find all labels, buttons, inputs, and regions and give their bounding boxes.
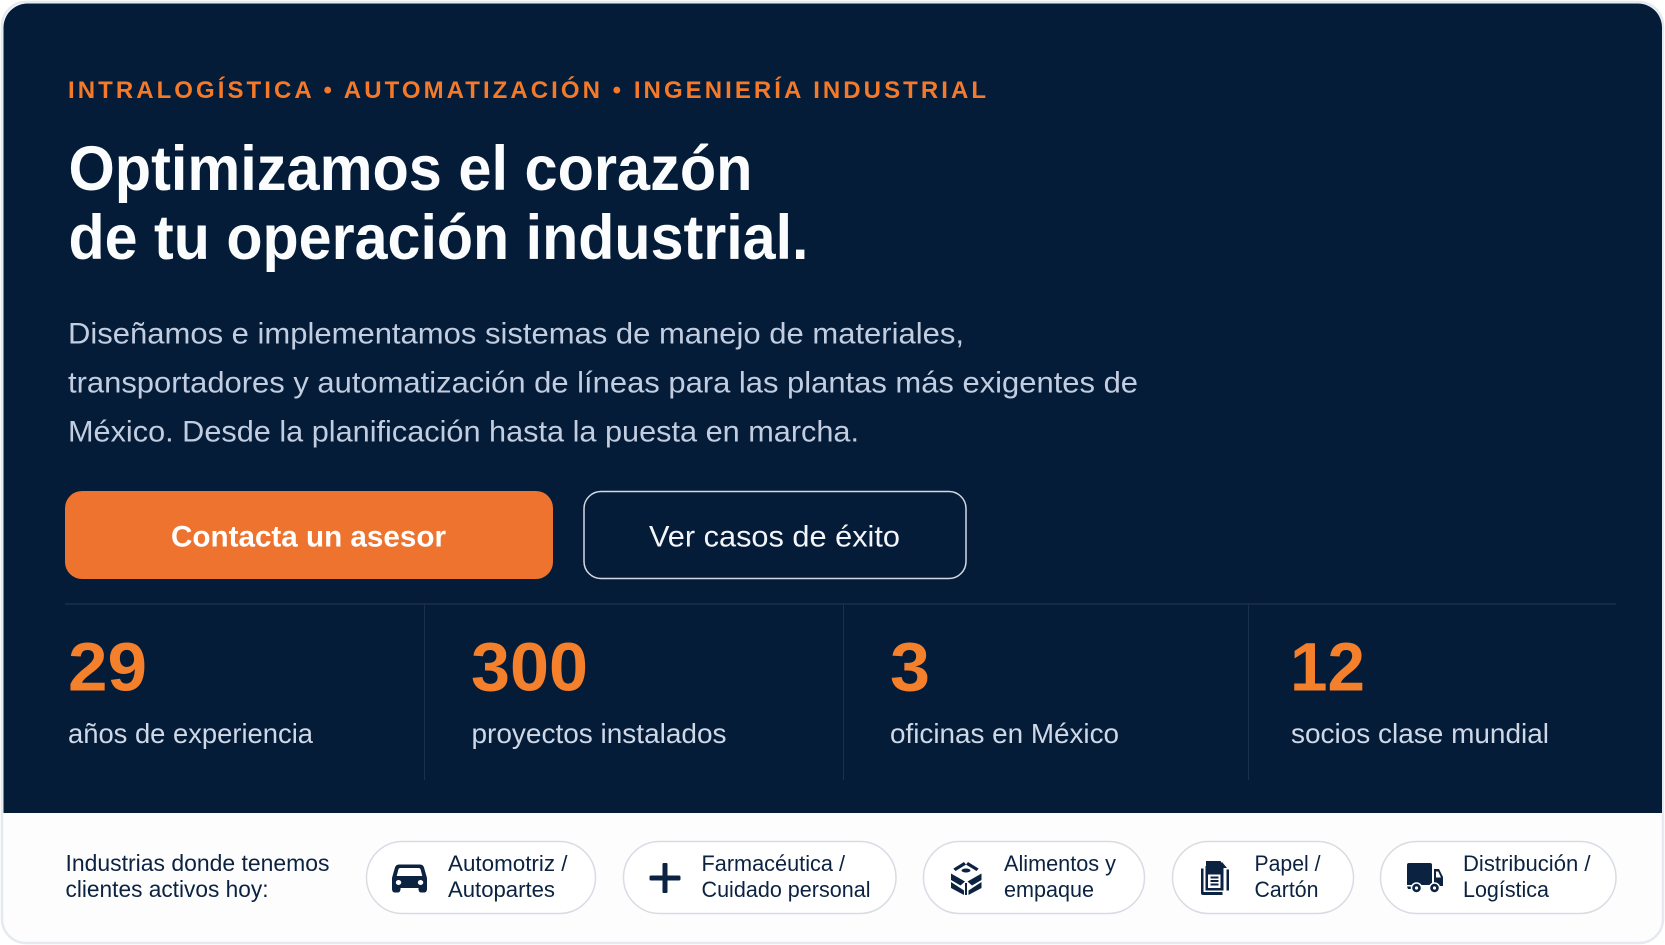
- button: contacta un asesor: [65, 491, 553, 579]
- panel: industries: [66, 842, 1616, 914]
- stat: 300 proyectos instalados: [471, 628, 726, 749]
- icon: documents: [1201, 861, 1229, 895]
- button: ver casos de éxito: [584, 492, 966, 578]
- button: ver casos de éxito: Ver casos de éxito: [649, 520, 900, 554]
- stat: 300 proyectos instalados: proyectos instalados: [472, 718, 726, 749]
- button: contacta un asesor: Contacta un asesor: [171, 520, 446, 554]
- pill: automotriz: Automotriz /: [448, 851, 568, 876]
- pill: alimentos: Alimentos y: [1004, 851, 1117, 876]
- stat: 3 oficinas en México: [890, 628, 1119, 749]
- stat: 3 oficinas en México: oficinas en México: [890, 718, 1119, 749]
- icon: package: [951, 862, 982, 895]
- eyebrow: INTRALOGÍSTICA • AUTOMATIZACIÓN • INGENIERÍA INDUSTRIAL: [68, 76, 986, 104]
- pill: alimentos: [924, 842, 1144, 914]
- pill: distribución: Logística: [1463, 877, 1549, 902]
- stat: 29 años de experiencia: años de experiencia: [68, 718, 313, 749]
- pill: alimentos: empaque: [1004, 877, 1094, 902]
- stat: 12 socios clase mundial: 12: [1290, 628, 1365, 706]
- pill: papel: [1172, 842, 1354, 914]
- description: [68, 318, 1138, 448]
- icon: plus: [650, 863, 680, 893]
- stat: 12 socios clase mundial: [1290, 628, 1549, 749]
- pill: papel: Papel /: [1254, 851, 1321, 876]
- stat: 3 oficinas en México: 3: [890, 628, 930, 706]
- description: transportadores y automatización de líneas para las plantas más exigentes de: [68, 366, 1138, 400]
- stat: 300 proyectos instalados: 300: [471, 628, 588, 706]
- industries intro text: Industrias donde tenemos: [66, 850, 330, 876]
- stat: 29 años de experiencia: [68, 628, 313, 749]
- industries intro text: clientes activos hoy:: [66, 876, 268, 902]
- title: de tu operación industrial.: [68, 203, 808, 273]
- icon: truck: [1407, 863, 1443, 893]
- title: Optimizamos el corazón: [68, 134, 752, 204]
- stat: 12 socios clase mundial: socios clase mundial: [1291, 718, 1549, 749]
- pill: farmacéutica: Cuidado personal: [702, 877, 870, 902]
- pill: farmacéutica: [624, 842, 896, 914]
- description: Diseñamos e implementamos sistemas de manejo de materiales,: [68, 318, 964, 350]
- industries intro text: [66, 850, 330, 902]
- stat: 29 años de experiencia: 29: [68, 628, 147, 706]
- icon: car: [392, 864, 427, 892]
- pill: papel: Cartón: [1254, 877, 1318, 902]
- description: México. Desde la planificación hasta la puesta en marcha.: [68, 416, 859, 448]
- pill: distribución: [1380, 842, 1616, 914]
- pill: distribución: Distribución /: [1463, 851, 1591, 876]
- pill: automotriz: [366, 842, 596, 914]
- title: [68, 134, 808, 273]
- pill: automotriz: Autopartes: [448, 877, 555, 902]
- pill: farmacéutica: Farmacéutica /: [702, 851, 846, 876]
